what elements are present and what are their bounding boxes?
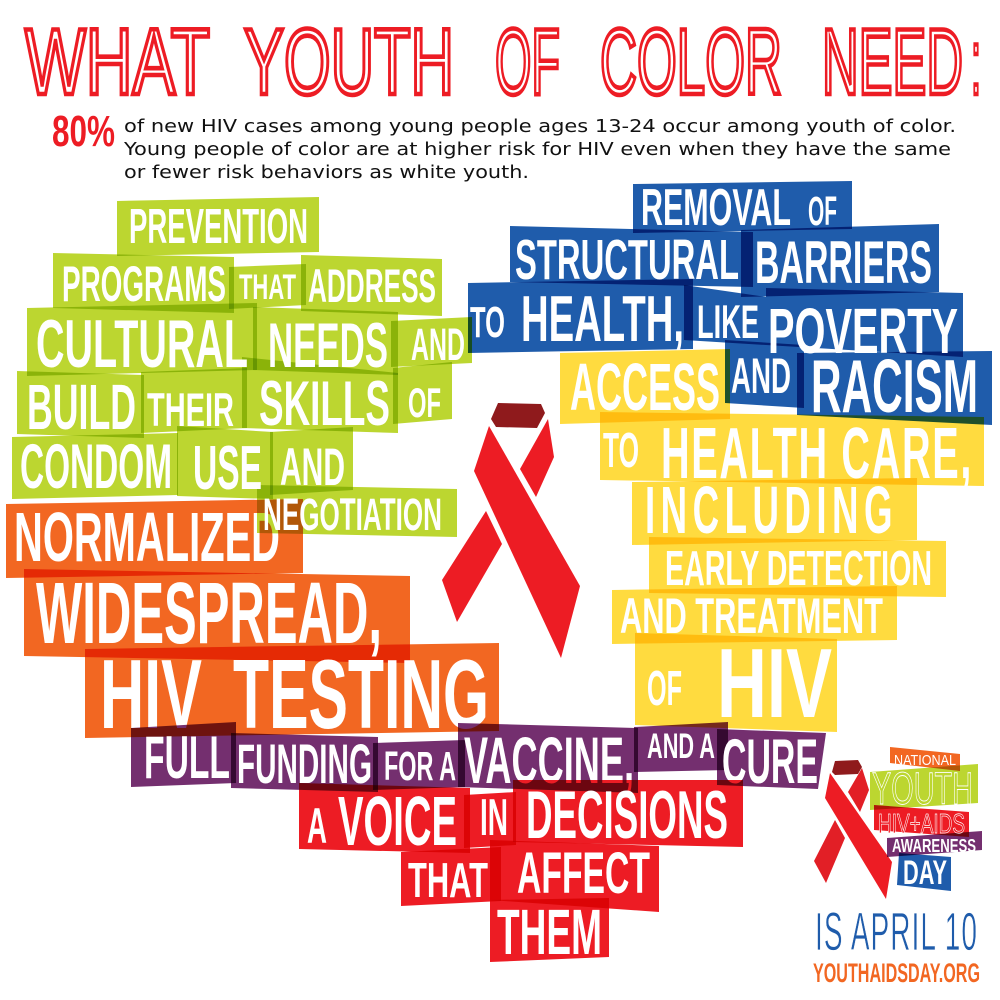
title: WHAT: [25, 9, 210, 114]
panel: a voice in decisions (red): THEM: [497, 896, 602, 968]
panel: access to health care (yellow): OF: [647, 662, 682, 716]
panel: removal of structural barriers (blue): HEALTH,: [521, 282, 684, 355]
panel: widespread HIV testing (orange): [6, 498, 499, 749]
icon: large red ribbon: [442, 403, 580, 658]
panel: prevention programs (green): NEGOTIATION: [263, 489, 442, 540]
icon: small red ribbon: [814, 760, 892, 899]
panel: widespread HIV testing (orange): WIDESPREAD,: [36, 565, 382, 662]
panel: prevention programs (green): SKILLS: [259, 369, 390, 439]
intro text: or fewer risk behaviors as white youth.: [124, 163, 529, 183]
panel: full funding (purple): [131, 722, 826, 797]
panel: prevention programs (green): NEEDS: [268, 311, 388, 381]
panel: prevention programs (green): BUILD: [27, 371, 136, 443]
panel: prevention programs (green): CULTURAL: [36, 306, 248, 382]
panel: a voice in decisions (red): DECISIONS: [526, 777, 728, 853]
panel: a voice in decisions (red): [299, 777, 743, 968]
logo boxes: [870, 747, 982, 891]
panel: a voice in decisions (red): A: [307, 798, 327, 854]
panel: full funding (purple): FULL: [144, 724, 230, 791]
panel: removal of structural barriers (blue): STRUCTURAL: [515, 228, 739, 292]
panel: a voice in decisions (red): THAT: [408, 854, 488, 908]
panel: removal of structural barriers (blue): TO: [470, 298, 505, 347]
intro text: [123, 117, 956, 183]
logo words: NATIONAL: [894, 752, 956, 769]
panel: prevention programs (green): THEIR: [147, 383, 234, 436]
panel: prevention programs (green): ADDRESS: [308, 259, 436, 312]
panel: widespread HIV testing (orange): NORMALIZED: [14, 498, 280, 576]
panel: access to health care (yellow): HIV: [717, 628, 832, 738]
panel: full funding (purple): CURE: [722, 727, 818, 797]
panel: widespread HIV testing (orange): TESTING: [233, 639, 489, 749]
panel: a voice in decisions (red): IN: [480, 789, 508, 847]
panel: prevention programs (green): PROGRAMS: [62, 256, 226, 312]
panel: prevention programs (green): AND: [280, 438, 345, 497]
panel: removal of structural barriers (blue): AND: [731, 348, 791, 404]
stat: 80%: 80%: [52, 107, 115, 156]
panel: a voice in decisions (red): AFFECT: [517, 841, 650, 906]
title: COLOR: [600, 9, 782, 114]
panel: prevention programs (green): OF: [408, 379, 441, 426]
title: OF: [495, 9, 560, 114]
panel: full funding (purple): FOR A: [384, 743, 456, 789]
panel: access to health care (yellow): ACCESS: [570, 350, 720, 425]
logo: National Youth HIV+AIDS Awareness Day: [814, 747, 982, 899]
logo words: DAY: [903, 854, 947, 892]
panel: access to health care (yellow): [560, 349, 984, 738]
logo words: [872, 752, 976, 892]
panel: access to health care (yellow): TO: [603, 424, 639, 478]
panel: prevention programs (green): AND: [411, 319, 465, 370]
panel: prevention programs (green): THAT: [239, 268, 296, 307]
panel: removal of structural barriers (blue): [468, 179, 992, 428]
text: :: [971, 9, 981, 114]
panel: full funding (purple): AND A: [647, 727, 715, 766]
intro text: of new HIV cases among young people ages 13-24 occur among youth of color.: [124, 117, 956, 137]
panel: widespread HIV testing (orange): HIV: [100, 639, 202, 749]
panel: full funding (purple): VACCINE,: [464, 723, 634, 797]
panel: prevention programs (green): PREVENTION: [129, 200, 308, 254]
panel: prevention programs (green): [12, 197, 472, 540]
panel: prevention programs (green): USE: [193, 434, 262, 503]
panel: full funding (purple): FUNDING: [237, 732, 372, 795]
intro text: Young people of color are at higher risk for HIV even when they have the same: [123, 140, 951, 160]
panel: a voice in decisions (red): VOICE: [338, 782, 457, 860]
panel: prevention programs (green): CONDOM: [20, 432, 172, 502]
panel: removal of structural barriers (blue): REMOVAL: [641, 179, 791, 237]
title: [25, 9, 981, 114]
panel: removal of structural barriers (blue): OF: [808, 188, 837, 234]
panel: removal of structural barriers (blue): LIKE: [697, 295, 759, 348]
title: YOUTH: [244, 9, 454, 114]
